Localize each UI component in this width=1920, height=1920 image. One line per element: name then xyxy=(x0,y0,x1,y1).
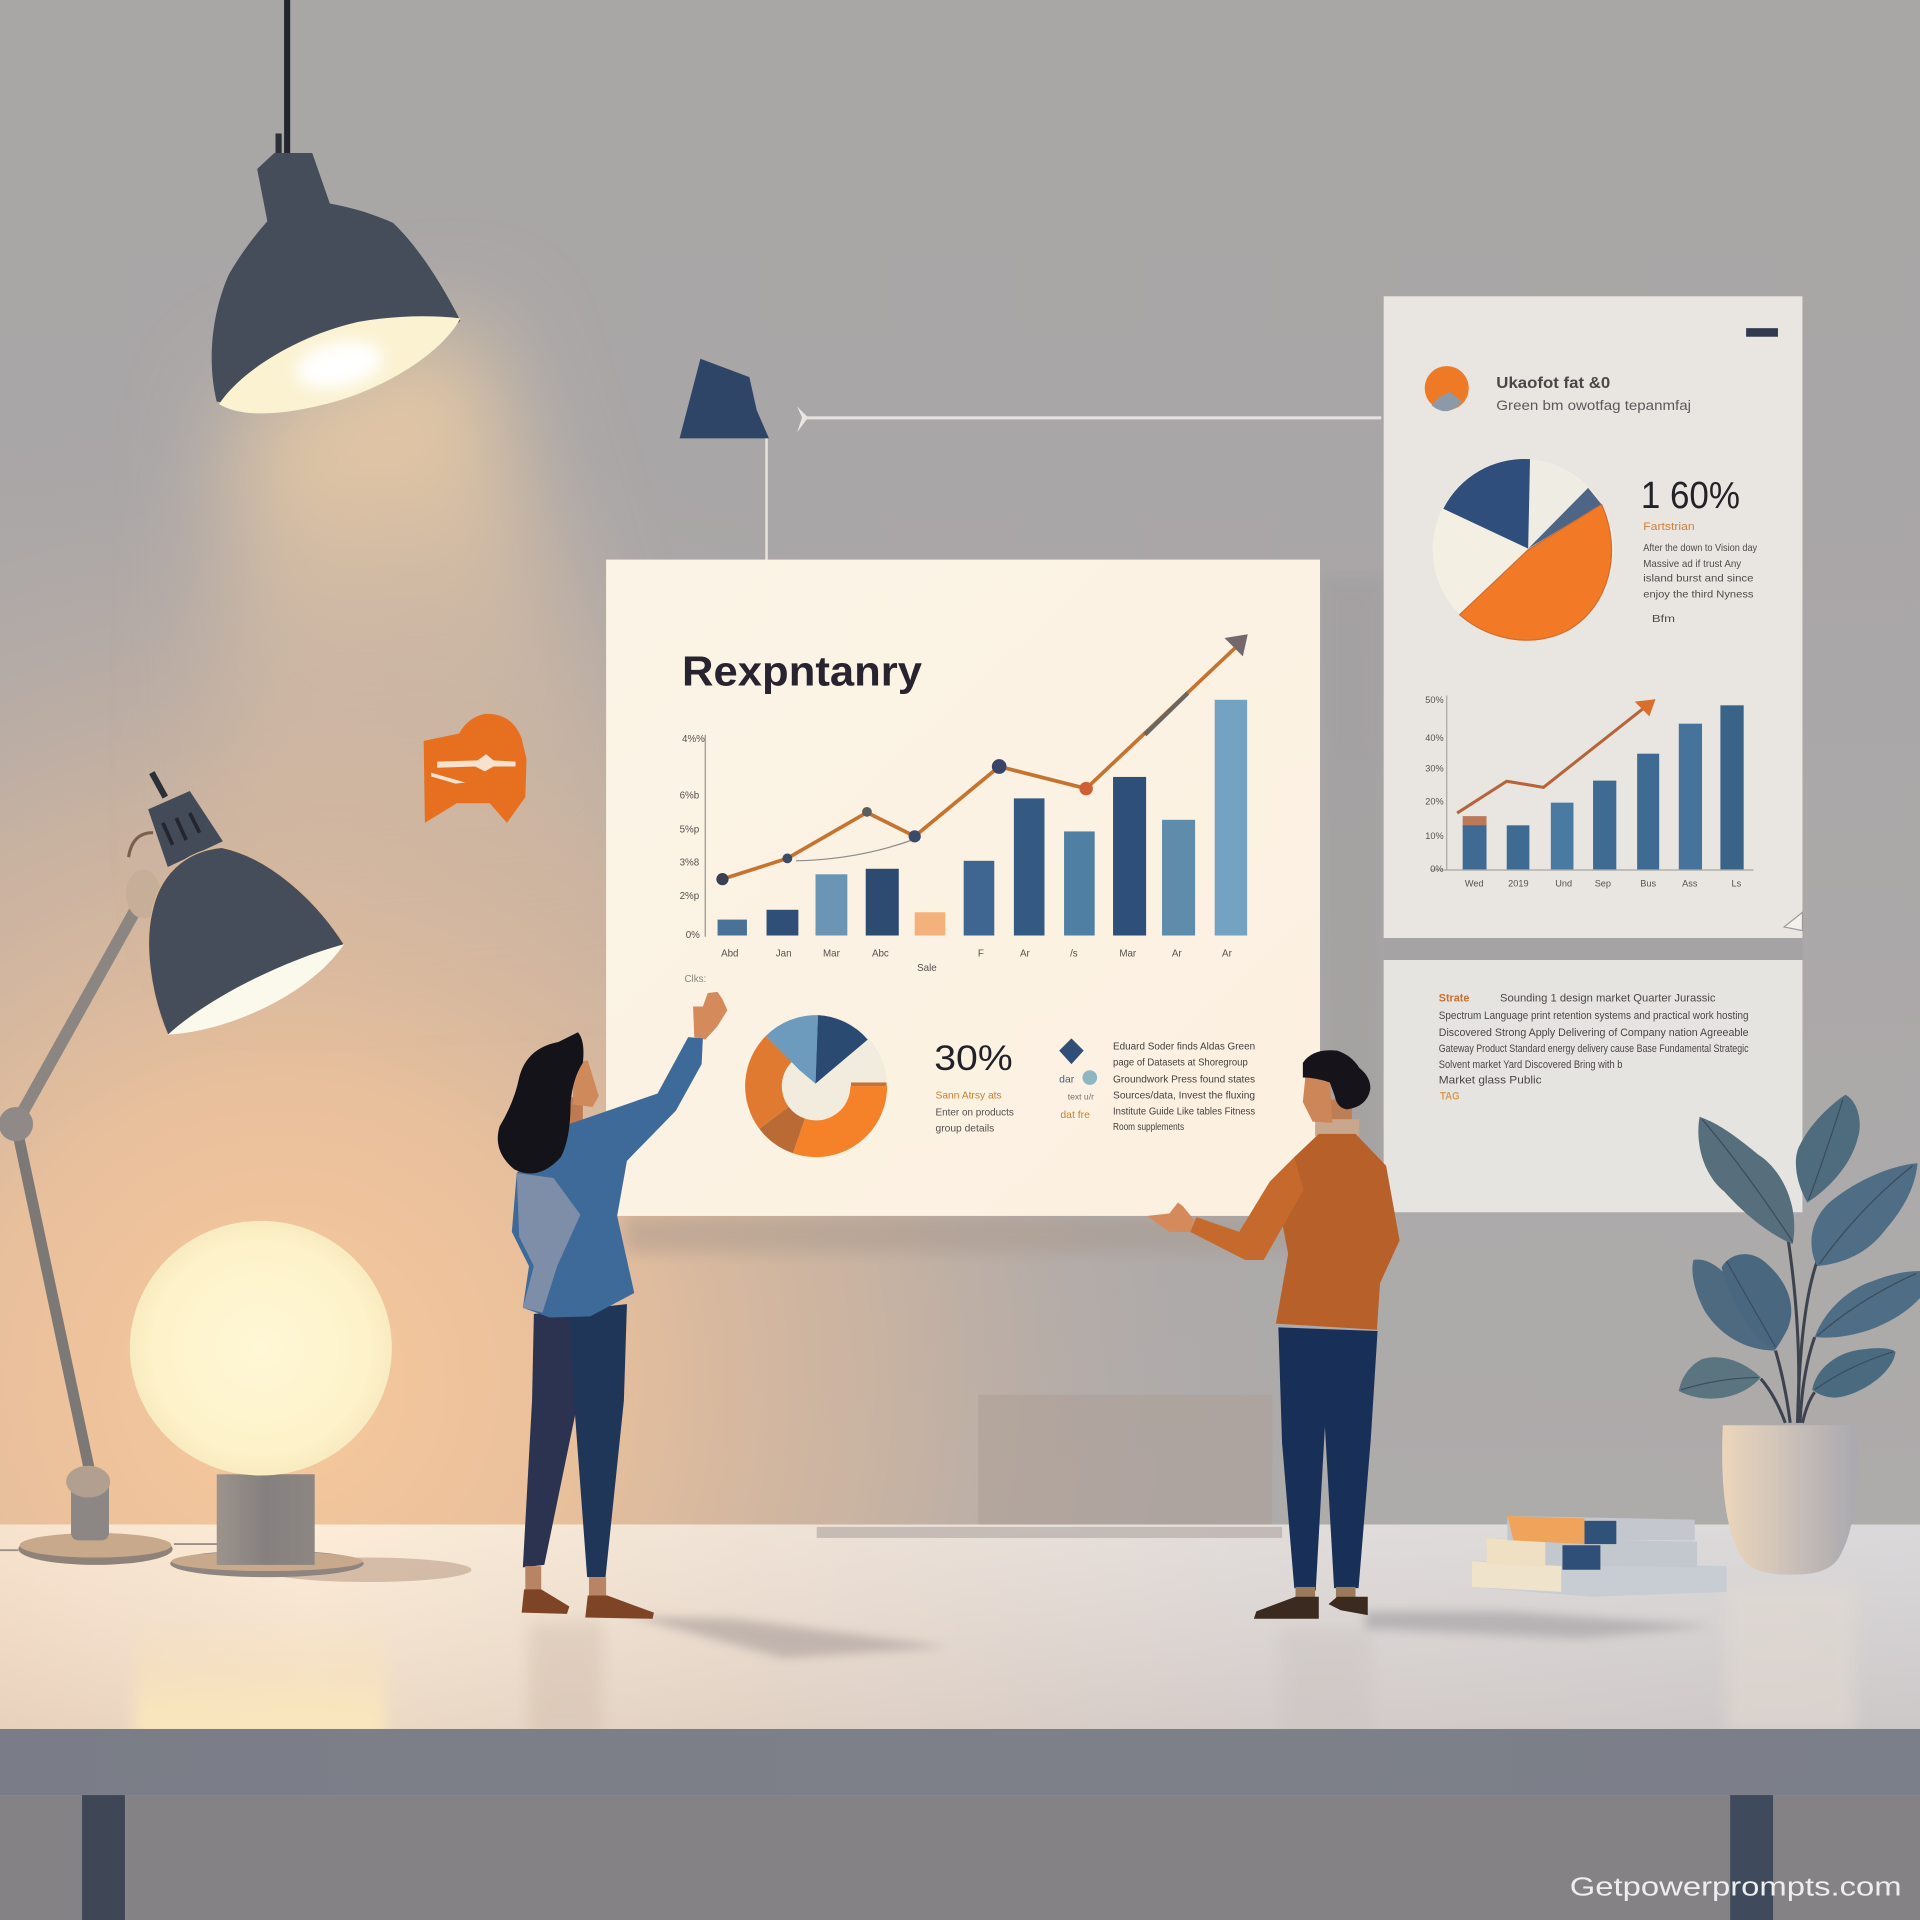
y axis labels xyxy=(680,734,705,941)
side stat text: Massive ad if trust Any xyxy=(1643,559,1741,570)
person: woman xyxy=(498,992,727,1619)
page curl xyxy=(1784,912,1802,931)
connector lines xyxy=(765,407,1381,561)
small tag xyxy=(1746,328,1778,337)
x axis labels: Abd xyxy=(721,948,738,959)
donut stat caption: Enter on products xyxy=(936,1108,1014,1119)
donut stat caption xyxy=(936,1090,1014,1134)
x axis labels: Jan xyxy=(776,948,792,959)
lamp vents xyxy=(163,813,200,845)
y labels xyxy=(1425,695,1444,874)
leaf xyxy=(1679,1357,1761,1399)
books xyxy=(1472,1516,1727,1597)
y labels: 0% xyxy=(1430,864,1443,874)
bars xyxy=(1463,705,1744,869)
leaf xyxy=(1815,1271,1920,1338)
shadow under main panel xyxy=(624,1216,1359,1253)
lamp knob xyxy=(276,133,282,156)
y axis labels: 3%8 xyxy=(680,858,700,869)
text block: Market glass Public xyxy=(1439,1075,1542,1087)
pot xyxy=(1722,1425,1857,1575)
main paragraph: Room supplements xyxy=(1113,1121,1184,1133)
lamp elbow joint xyxy=(0,1107,33,1141)
x labels: Ls xyxy=(1731,879,1742,889)
x labels: Bus xyxy=(1640,879,1656,889)
main paragraph xyxy=(1113,1040,1255,1133)
side stat: 1 60% xyxy=(1641,475,1740,517)
side report subheading: Green bm owotfag tepanmfaj xyxy=(1496,397,1691,413)
stems xyxy=(1761,1237,1817,1423)
legend icons: text u/r xyxy=(1068,1092,1094,1102)
text block: Solvent market Yard Discovered Bring with b xyxy=(1439,1059,1622,1071)
hand xyxy=(1147,1202,1194,1232)
middle book xyxy=(1487,1538,1697,1570)
lamp cord xyxy=(0,1544,218,1550)
right shoe xyxy=(1329,1597,1368,1615)
face xyxy=(1303,1078,1332,1123)
person: man xyxy=(1147,1050,1400,1619)
y axis labels: 5%p xyxy=(680,825,700,836)
shadow beside main panel xyxy=(1320,576,1384,1218)
y axis labels: 4%% xyxy=(682,734,705,745)
right shoe xyxy=(585,1596,654,1619)
leaf xyxy=(1692,1259,1776,1351)
chart axis xyxy=(704,735,706,937)
lamp cord xyxy=(284,0,290,157)
pie chart xyxy=(1433,459,1614,640)
connector flag icon xyxy=(680,359,769,438)
side stat text: After the down to Vision day xyxy=(1643,543,1757,554)
lamp pin xyxy=(152,773,165,797)
lamp bulb glare xyxy=(291,334,387,396)
leaf xyxy=(1812,1348,1896,1398)
x labels: Und xyxy=(1555,879,1572,889)
x axis labels: Ar xyxy=(1172,948,1182,959)
lamp opening xyxy=(168,944,344,1035)
legs xyxy=(1278,1327,1378,1591)
side stat text xyxy=(1643,543,1757,625)
left shoe xyxy=(522,1589,569,1614)
leaf xyxy=(1698,1117,1794,1244)
main paragraph: Sources/data, Invest the fluxing xyxy=(1113,1089,1255,1101)
lamp neck xyxy=(257,153,331,225)
lamp collar xyxy=(66,1466,110,1498)
main paragraph: Groundwork Press found states xyxy=(1113,1073,1255,1085)
leaf xyxy=(1796,1095,1860,1202)
side bar chart xyxy=(1425,695,1753,889)
side stat text: enjoy the third Nyness xyxy=(1643,590,1753,601)
x labels xyxy=(1465,879,1742,889)
trend line xyxy=(796,840,912,861)
trend arrow xyxy=(1635,699,1656,716)
raised sleeve xyxy=(566,1037,703,1169)
leaf veins xyxy=(1681,1100,1916,1390)
reflections on table xyxy=(135,1616,386,1736)
raised hand xyxy=(693,992,727,1040)
x axis labels: /s xyxy=(1070,948,1078,959)
hair xyxy=(498,1032,583,1173)
left shoe xyxy=(1254,1597,1319,1619)
orange tag lower: TAG xyxy=(1440,1091,1460,1103)
trend points xyxy=(716,759,1093,885)
hair xyxy=(1303,1050,1370,1109)
wall background xyxy=(0,0,1920,1531)
orange badge xyxy=(424,714,527,823)
below table wall xyxy=(0,1795,1920,1920)
lamp opening xyxy=(219,316,460,413)
main paragraph: Eduard Soder finds Aldas Green xyxy=(1113,1040,1255,1052)
main paragraph: page of Datasets at Shoregroup xyxy=(1113,1056,1248,1068)
ankles xyxy=(1296,1587,1356,1599)
y axis labels: 0% xyxy=(686,930,700,941)
y labels: 20% xyxy=(1425,796,1444,806)
top book xyxy=(1507,1516,1695,1544)
globe base xyxy=(170,1550,364,1577)
shirt shadow panel xyxy=(517,1173,580,1313)
donut stat caption: group details xyxy=(936,1123,994,1134)
legend icons: dat fre xyxy=(1060,1110,1090,1121)
lamp lower arm xyxy=(16,1124,91,1476)
globe socket xyxy=(217,1474,315,1565)
lamp base top xyxy=(20,1533,171,1558)
neck xyxy=(568,1097,583,1129)
back leg xyxy=(523,1310,576,1567)
main title: Rexpntanry xyxy=(682,648,922,695)
side stat text: island burst and since xyxy=(1643,574,1754,585)
orange tag: Strate xyxy=(1439,993,1469,1005)
gap shadow between side panels xyxy=(1384,938,1802,960)
panel: bottom right text xyxy=(1384,960,1802,1212)
legend icons: dar xyxy=(1059,1074,1075,1085)
text block: Spectrum Language print retention systems and practical work hosting xyxy=(1439,1010,1749,1022)
bottom book xyxy=(1472,1561,1727,1597)
lamp head joint xyxy=(126,869,160,918)
lamp neck xyxy=(148,791,223,867)
x labels: Wed xyxy=(1465,879,1484,889)
donut stat caption: Sann Atrsy ats xyxy=(936,1090,1002,1101)
side stat label: Fartstrian xyxy=(1643,521,1695,533)
donut chart xyxy=(745,1015,887,1157)
side report heading: Ukaofot fat &0 xyxy=(1496,375,1610,392)
front leg xyxy=(569,1304,627,1577)
x axis labels: Ar xyxy=(1222,948,1233,959)
x axis labels xyxy=(721,948,1233,974)
globe lamp xyxy=(130,1221,392,1577)
lamp dome xyxy=(149,847,344,1035)
arm xyxy=(1190,1157,1303,1260)
y axis labels: 2%p xyxy=(680,891,700,902)
x axis labels: Mar xyxy=(823,948,841,959)
light cone from pendant lamp xyxy=(208,324,686,1004)
table leg right xyxy=(1730,1795,1773,1920)
x axis labels: Mar xyxy=(1119,948,1137,959)
lamp upper arm xyxy=(16,894,144,1124)
y axis labels: 6%b xyxy=(680,790,700,801)
lamp hook xyxy=(129,833,153,857)
y labels: 50% xyxy=(1425,695,1444,705)
side stat text: Bfm xyxy=(1652,614,1675,625)
plant xyxy=(1679,1095,1920,1575)
panel: main report xyxy=(606,560,1320,1216)
leaf xyxy=(1811,1163,1918,1266)
collar xyxy=(1315,1119,1359,1136)
leaf xyxy=(1722,1254,1791,1349)
trend arrow head xyxy=(1224,634,1248,656)
table leg left xyxy=(82,1795,125,1920)
x axis labels: Sale xyxy=(917,963,937,974)
x axis labels: F xyxy=(978,948,984,959)
main paragraph: Institute Guide Like tables Fitness xyxy=(1113,1105,1255,1117)
lamp post xyxy=(71,1476,109,1540)
panel: top right report xyxy=(1384,296,1802,938)
globe shade xyxy=(130,1221,392,1476)
text block xyxy=(1439,993,1749,1087)
watermark: Getpowerprompts.com xyxy=(1570,1874,1902,1902)
small callout label: Clks: xyxy=(684,974,706,985)
text block: Sounding 1 design market Quarter Jurassic xyxy=(1500,993,1716,1005)
table top xyxy=(0,1524,1920,1736)
x labels: Ass xyxy=(1682,879,1698,889)
table edge xyxy=(0,1729,1920,1795)
torso xyxy=(512,1123,634,1318)
x labels: 2019 xyxy=(1508,879,1529,889)
pendant lamp xyxy=(212,0,460,413)
trend line xyxy=(1457,707,1646,813)
chart axes xyxy=(1430,696,1753,870)
text block: Gateway Product Standard energy delivery cause Base Fundamental Strategic xyxy=(1439,1043,1749,1055)
desk lamp xyxy=(0,773,344,1565)
x axis labels: Ar xyxy=(1020,948,1031,959)
bar chart xyxy=(680,634,1248,974)
x labels: Sep xyxy=(1595,879,1611,889)
ankles xyxy=(525,1566,606,1602)
text block: Discovered Strong Apply Delivering of Company nation Agreeable xyxy=(1439,1027,1749,1039)
y labels: 30% xyxy=(1425,763,1444,773)
globe base top xyxy=(171,1551,362,1571)
chart bars xyxy=(718,700,1247,936)
x axis labels: Abc xyxy=(872,948,889,959)
y labels: 10% xyxy=(1425,831,1444,841)
lamp dome xyxy=(212,203,460,403)
floor shadows xyxy=(263,1527,1714,1658)
icon: round logo xyxy=(1425,366,1469,411)
donut stat: 30% xyxy=(934,1038,1013,1078)
y labels: 40% xyxy=(1425,733,1444,743)
face xyxy=(573,1060,599,1107)
legend icons xyxy=(1059,1038,1097,1121)
neck xyxy=(1322,1100,1352,1124)
torso xyxy=(1276,1134,1400,1330)
lamp base xyxy=(18,1533,173,1565)
